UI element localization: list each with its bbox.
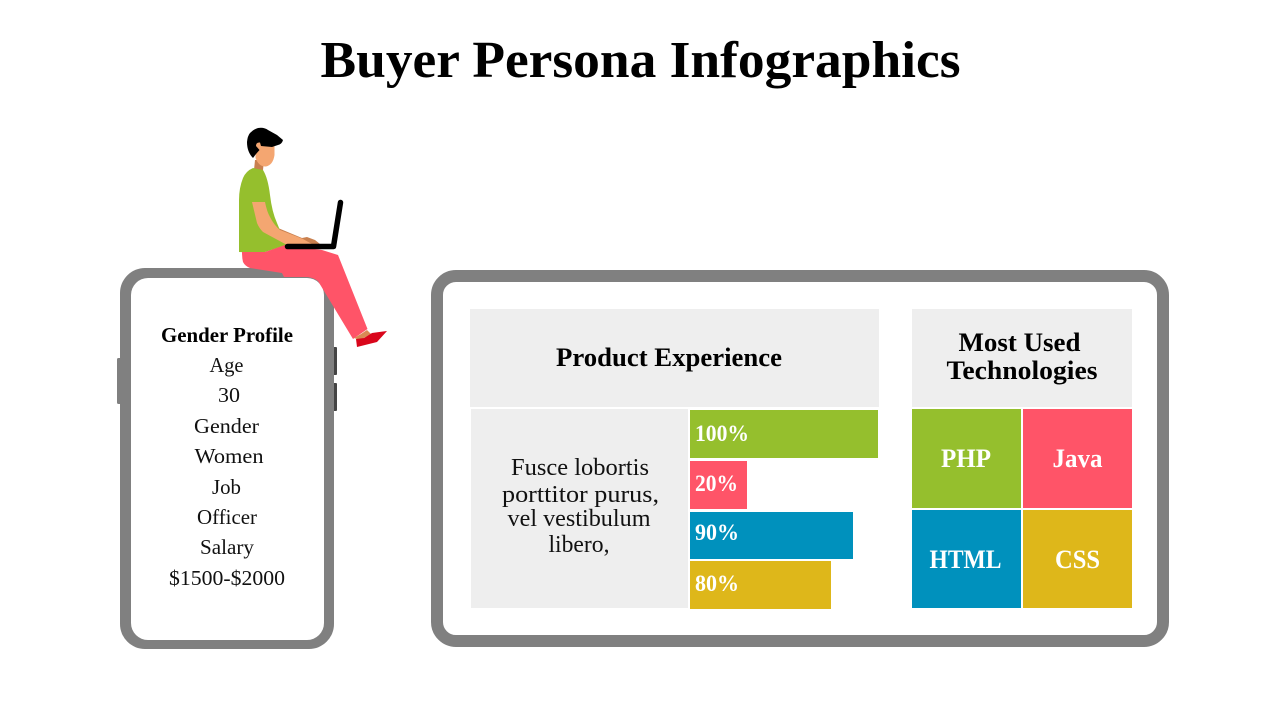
bar: 20% [690,461,747,509]
heading: product experience [470,309,879,407]
trousers [242,245,368,339]
panel: product experience [470,309,879,609]
shirt [239,168,286,252]
profile text: Age [210,353,244,377]
heading: product experience: Product Experience [556,343,782,372]
laptop [288,202,340,246]
bar: 20%: 20% [695,471,738,496]
text block: description: porttitor purus, [502,482,659,508]
title: Buyer Persona Infographics [320,32,960,89]
icon: person with laptop [239,128,387,347]
phone frame [120,268,334,649]
far arm [272,228,320,246]
text block: description [471,409,688,608]
profile text: 30 [218,383,240,407]
profile text: Officer [197,505,257,529]
bar: 100% [690,410,878,458]
profile text: Salary [200,535,254,559]
profile text: Gender Profile [161,323,293,347]
icon: phone side buttons [117,347,337,411]
text block: description: vel vestibulum [508,506,651,532]
heading: most used technologies: Most Used [958,328,1081,357]
tile: Java [1023,409,1132,508]
tile: PHP [912,409,1021,508]
bar: 90%: 90% [695,520,739,545]
foot [354,330,371,340]
panel: phone profile [117,268,337,649]
phone screen [131,278,324,640]
tile: CSS [1023,510,1132,608]
text block: description: libero, [548,532,610,558]
neck [254,160,264,170]
bar chart: experience levels [690,410,878,609]
hair [247,128,283,158]
bar: 80% [690,561,831,609]
profile text: Job [212,475,241,499]
bar: 80%: 80% [695,571,739,596]
tile: PHP: PHP [941,444,991,473]
heading: most used technologies: Technologies [946,356,1098,385]
heading: most used technologies [912,309,1132,407]
bar: 90% [690,512,853,559]
panel: tablet frame [437,276,1163,641]
bar: 100%: 100% [695,421,749,446]
panel: most used technologies [912,309,1132,608]
near arm [252,202,312,245]
text block: description: Fusce lobortis [511,455,649,481]
profile text: Gender [194,414,259,438]
profile text: Women [194,444,264,468]
tile: Java: Java [1052,444,1102,473]
tile: HTML: HTML [930,545,1002,574]
face [256,142,274,167]
profile text: $1500-$2000 [169,566,285,590]
shoe [356,331,387,347]
tile: HTML [912,510,1021,608]
profile text [161,323,293,590]
tile: CSS: CSS [1055,545,1100,574]
